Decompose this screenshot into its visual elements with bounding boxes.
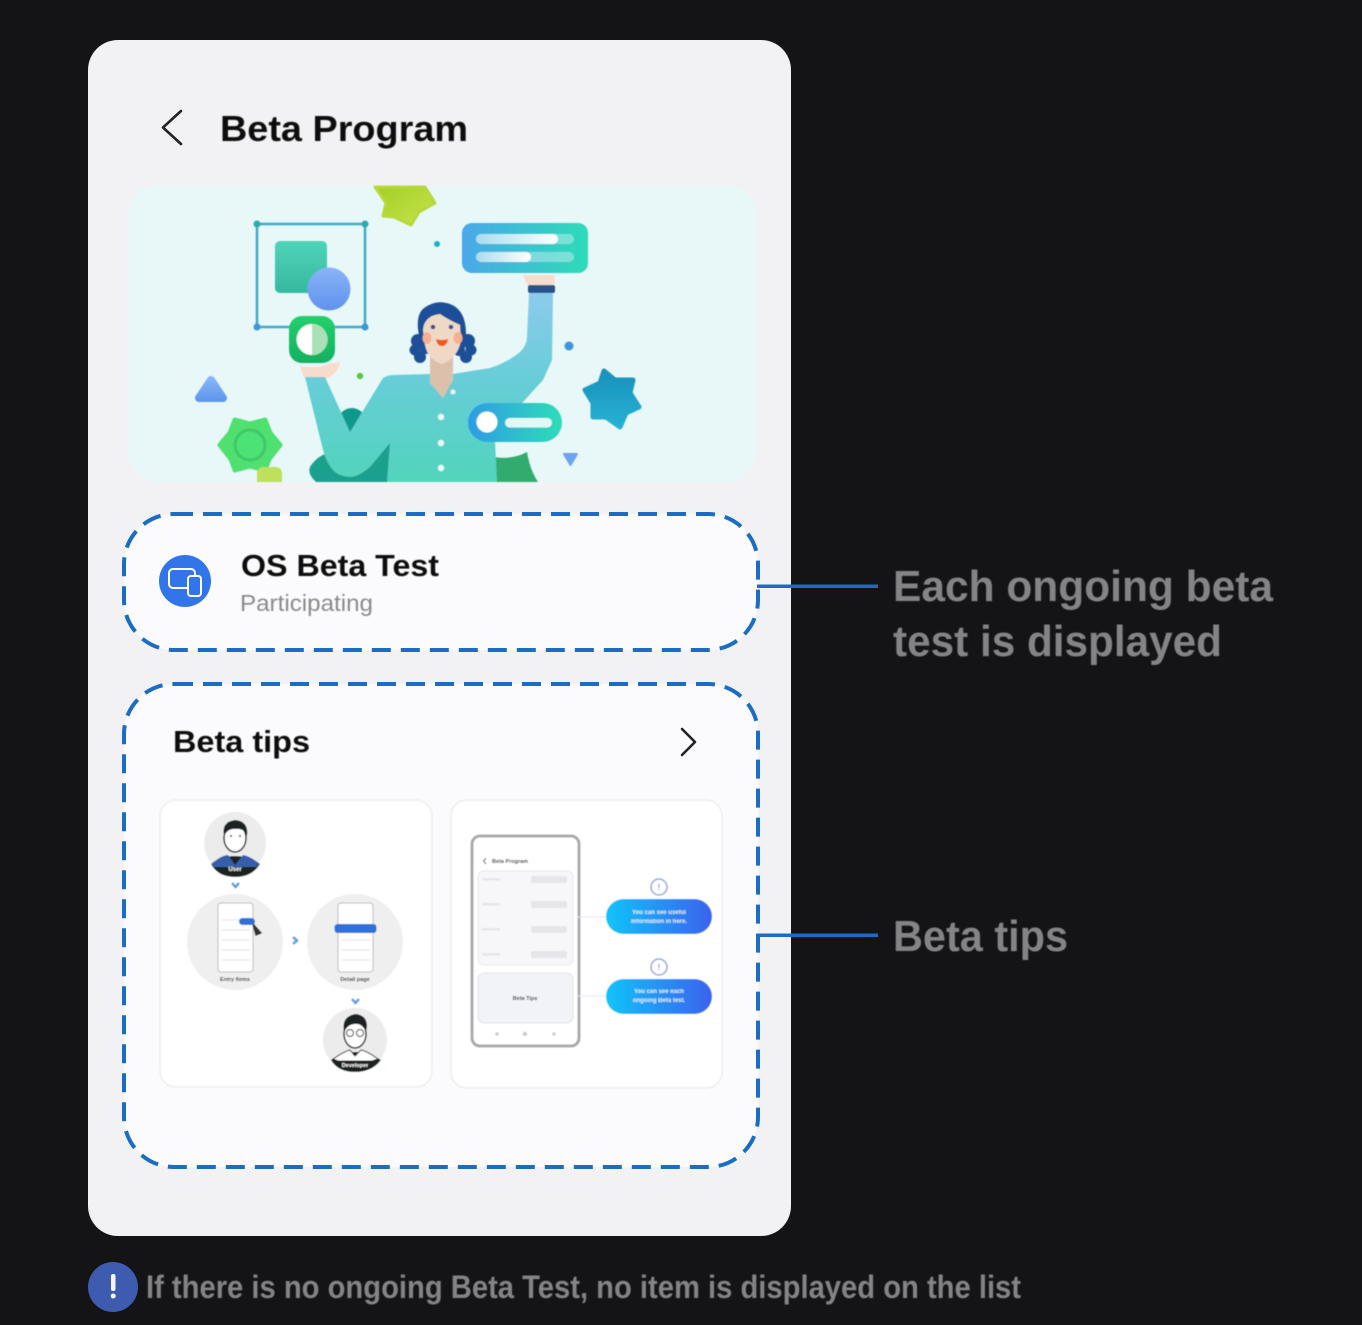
callout 2: ! (658, 963, 660, 972)
hair (410, 302, 476, 363)
arrow down (232, 883, 239, 887)
bushes behind person (309, 408, 538, 482)
phone mock-up: Beta Program (492, 859, 528, 865)
leader lines (578, 917, 606, 996)
panel: Beta tips (124, 684, 758, 1167)
torso and arms (305, 293, 553, 482)
icon: devices (159, 555, 211, 607)
watch (528, 285, 555, 293)
lower hand (300, 362, 340, 378)
heading: Beta tips: Beta tips (173, 724, 310, 759)
annotation: ongoing beta test: test is displayed (893, 617, 1222, 666)
tip card: flow diagram (160, 800, 432, 1087)
icon: back chevron (163, 111, 181, 144)
footnote: If there is no ongoing Beta Test, no item is displayed on the list (146, 1269, 1021, 1305)
callout 1: You can see useful (632, 910, 686, 916)
phone mock-up (472, 836, 579, 1046)
raised card (462, 223, 588, 273)
avatar: developer: Developer (342, 1063, 369, 1069)
tip card: annotated phone (451, 800, 722, 1088)
face (422, 314, 462, 364)
icon: triangle (199, 380, 223, 398)
shirt buttons (438, 390, 456, 471)
person (300, 223, 588, 482)
avatar: user (204, 812, 266, 877)
arrow down (352, 999, 359, 1003)
panel: OS Beta Test (124, 514, 758, 650)
annotation: ongoing beta test (893, 562, 1274, 666)
small dots (357, 241, 574, 379)
step: entry items: Entry Items (220, 977, 250, 983)
title: OS Beta Test: OS Beta Test (241, 548, 439, 583)
annotation: beta tips: Beta tips (893, 912, 1068, 961)
callout 1: ! (658, 883, 660, 892)
raised hand (523, 275, 555, 286)
step: detail page (307, 894, 403, 990)
callout 1 (606, 879, 712, 934)
icon: small inverted triangle (564, 454, 577, 465)
step: entry items (187, 894, 283, 990)
callout 2: ongoing Beta test. (633, 998, 685, 1004)
icon: green star (220, 420, 280, 470)
note icon (88, 1262, 138, 1312)
connector: ongoing beta test (757, 584, 878, 588)
avatar: user: User (228, 867, 242, 873)
toggle (468, 403, 562, 442)
callout 1: information in here. (631, 919, 687, 925)
heading: Beta Program: Beta Program (220, 108, 468, 149)
status: Participating: Participating (240, 590, 373, 616)
icon: green app icon (289, 316, 335, 363)
selection frame with shapes (254, 220, 368, 330)
annotation: ongoing beta test: Each ongoing beta (893, 562, 1274, 611)
icon: blue star (585, 371, 639, 427)
arrow right (293, 937, 297, 944)
icon: lime star (375, 187, 435, 225)
connector: beta tips (757, 934, 878, 937)
phone mock-up: Beta Tips (513, 996, 537, 1002)
banner illustration (128, 185, 756, 482)
callout 2: You can see each (634, 989, 684, 995)
callout 2 (606, 959, 712, 1014)
panel: phone screen (88, 40, 791, 1236)
icon: forward chevron (682, 729, 695, 755)
neck (430, 355, 453, 398)
step: detail page: Detail page (340, 977, 370, 983)
avatar: developer (323, 1008, 387, 1072)
icon: lime block (257, 467, 282, 482)
